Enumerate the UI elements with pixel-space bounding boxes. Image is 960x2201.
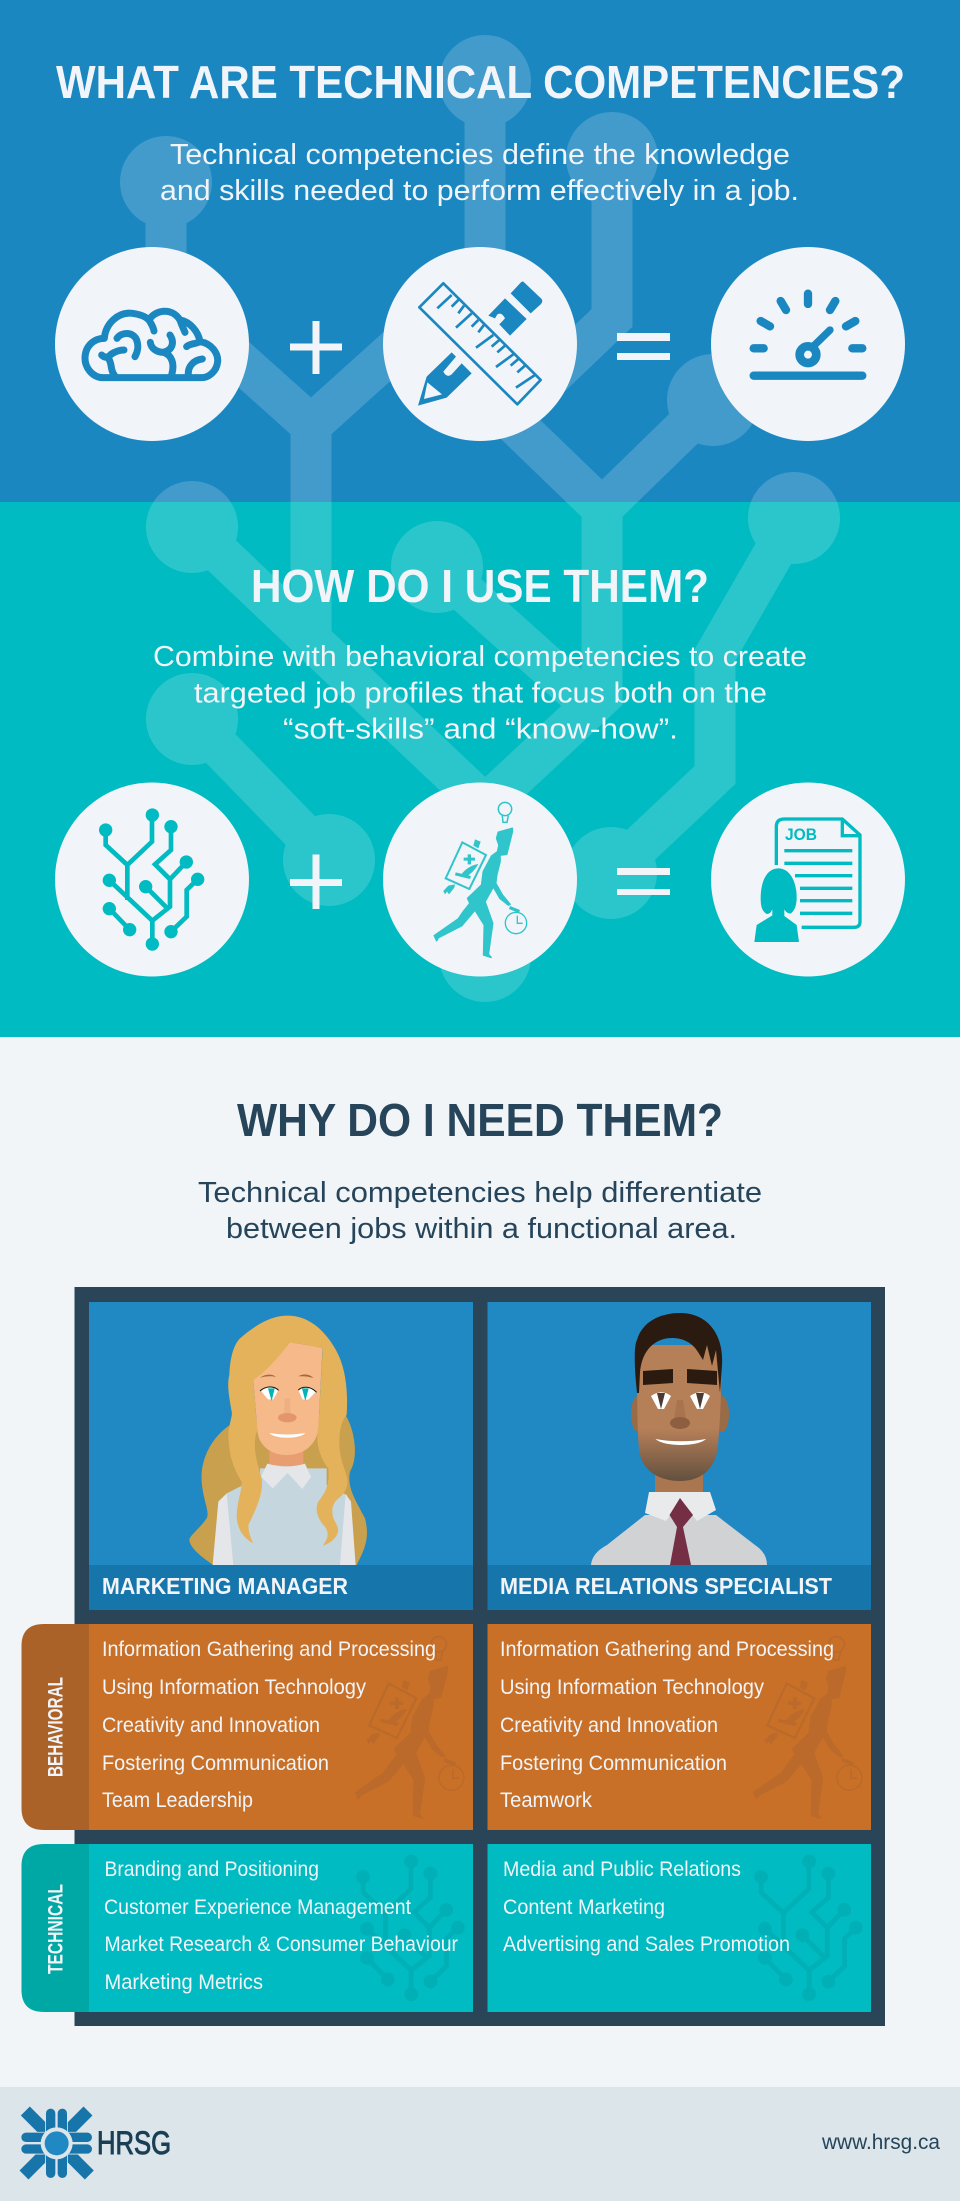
tab: behavioral: BEHAVIORAL <box>44 1677 68 1777</box>
competency list: Advertising and Sales Promotion <box>503 1933 790 1956</box>
intro text: Technical competencies define the knowledge <box>170 139 790 171</box>
tab: behavioral <box>22 1624 89 1830</box>
competency list <box>503 1858 790 1956</box>
icon: ruler and pencil in circle <box>383 247 577 441</box>
section: how do I use them <box>55 560 905 976</box>
competency list <box>104 1858 458 1994</box>
portrait panel: media relations specialist <box>488 1302 871 1610</box>
table frame <box>74 1287 885 2026</box>
logo: HRSG: HRSG <box>97 2125 171 2161</box>
watermark: walking figure <box>356 1637 464 1818</box>
role label bar <box>89 1565 473 1610</box>
panel: how do I use them background <box>0 502 960 1037</box>
panel: technical competencies, marketing manager <box>89 1844 473 2012</box>
icon: plus <box>290 321 342 374</box>
illustration: woman <box>189 1316 367 1565</box>
competency list: Team Leadership <box>102 1789 253 1812</box>
intro text: “soft-skills” and “know-how”. <box>283 714 678 746</box>
icon: brain in circle <box>55 247 249 441</box>
competency list: Customer Experience Management <box>104 1896 411 1919</box>
icon: plus <box>290 854 342 909</box>
illustration: man <box>591 1313 767 1565</box>
competency list: Fostering Communication <box>500 1752 727 1775</box>
watermark: walking figure <box>754 1637 862 1818</box>
intro text <box>160 139 799 207</box>
panel: behavioral competencies, media relations specialist <box>488 1624 871 1830</box>
competency list: Fostering Communication <box>102 1752 329 1775</box>
intro text: Combine with behavioral competencies to create <box>153 641 807 673</box>
intro text <box>198 1177 762 1245</box>
website URL: www.hrsg.ca <box>821 2131 940 2154</box>
watermark: circuit tree <box>356 1855 465 2001</box>
competency list <box>102 1638 436 1812</box>
competency list: Teamwork <box>500 1789 592 1812</box>
competency list: Branding and Positioning <box>104 1858 319 1881</box>
intro text: and skills needed to perform effectively in a job. <box>160 175 799 207</box>
competency list: Creativity and Innovation <box>102 1714 320 1737</box>
panel: what are technical competencies background <box>0 0 960 502</box>
tab: technical: TECHNICAL <box>44 1884 68 1974</box>
panel: behavioral competencies, marketing manager <box>89 1624 473 1830</box>
competency list: Media and Public Relations <box>503 1858 741 1881</box>
competency list <box>500 1638 834 1812</box>
competency list: Information Gathering and Processing <box>500 1638 834 1661</box>
heading: WHAT ARE TECHNICAL COMPETENCIES? <box>56 56 905 108</box>
watermark: circuit tree <box>754 1855 863 2001</box>
role label bar <box>488 1565 871 1610</box>
heading: WHY DO I NEED THEM? <box>237 1094 723 1146</box>
icon label: JOB: JOB <box>785 826 817 844</box>
comparison table <box>22 1287 885 2026</box>
intro text <box>153 641 807 746</box>
portrait panel: marketing manager <box>89 1302 473 1610</box>
panel: technical competencies, media relations specialist <box>488 1844 871 2012</box>
competency list: Market Research & Consumer Behaviour <box>104 1933 458 1956</box>
competency list: Marketing Metrics <box>104 1971 263 1994</box>
background circuit tree motif <box>120 35 840 1002</box>
competency list: Using Information Technology <box>102 1676 366 1699</box>
role label: MEDIA RELATIONS SPECIALIST <box>500 1573 832 1599</box>
intro text: targeted job profiles that focus both on the <box>194 678 767 710</box>
section: why do I need them <box>198 1094 762 1245</box>
heading: HOW DO I USE THEM? <box>251 560 709 612</box>
footer <box>0 2087 960 2201</box>
panel: why do I need them background <box>0 1037 960 2087</box>
role label: MARKETING MANAGER <box>102 1573 348 1599</box>
icon: gauge in circle <box>711 247 905 441</box>
competency list: Information Gathering and Processing <box>102 1638 436 1661</box>
tab: technical <box>22 1844 89 2012</box>
intro text: Technical competencies help differentiate <box>198 1177 762 1209</box>
competency list: Creativity and Innovation <box>500 1714 718 1737</box>
icon: walking figure in circle <box>383 782 577 976</box>
icon: equals <box>617 333 670 360</box>
icon: equals <box>617 868 670 895</box>
icon: job document in circle <box>711 782 905 976</box>
logo: HRSG <box>24 2111 171 2175</box>
competency list: Content Marketing <box>503 1896 665 1919</box>
icon: circuit tree in circle <box>55 782 249 976</box>
competency list: Using Information Technology <box>500 1676 764 1699</box>
section: what are technical competencies <box>55 56 905 441</box>
intro text: between jobs within a functional area. <box>226 1213 737 1245</box>
